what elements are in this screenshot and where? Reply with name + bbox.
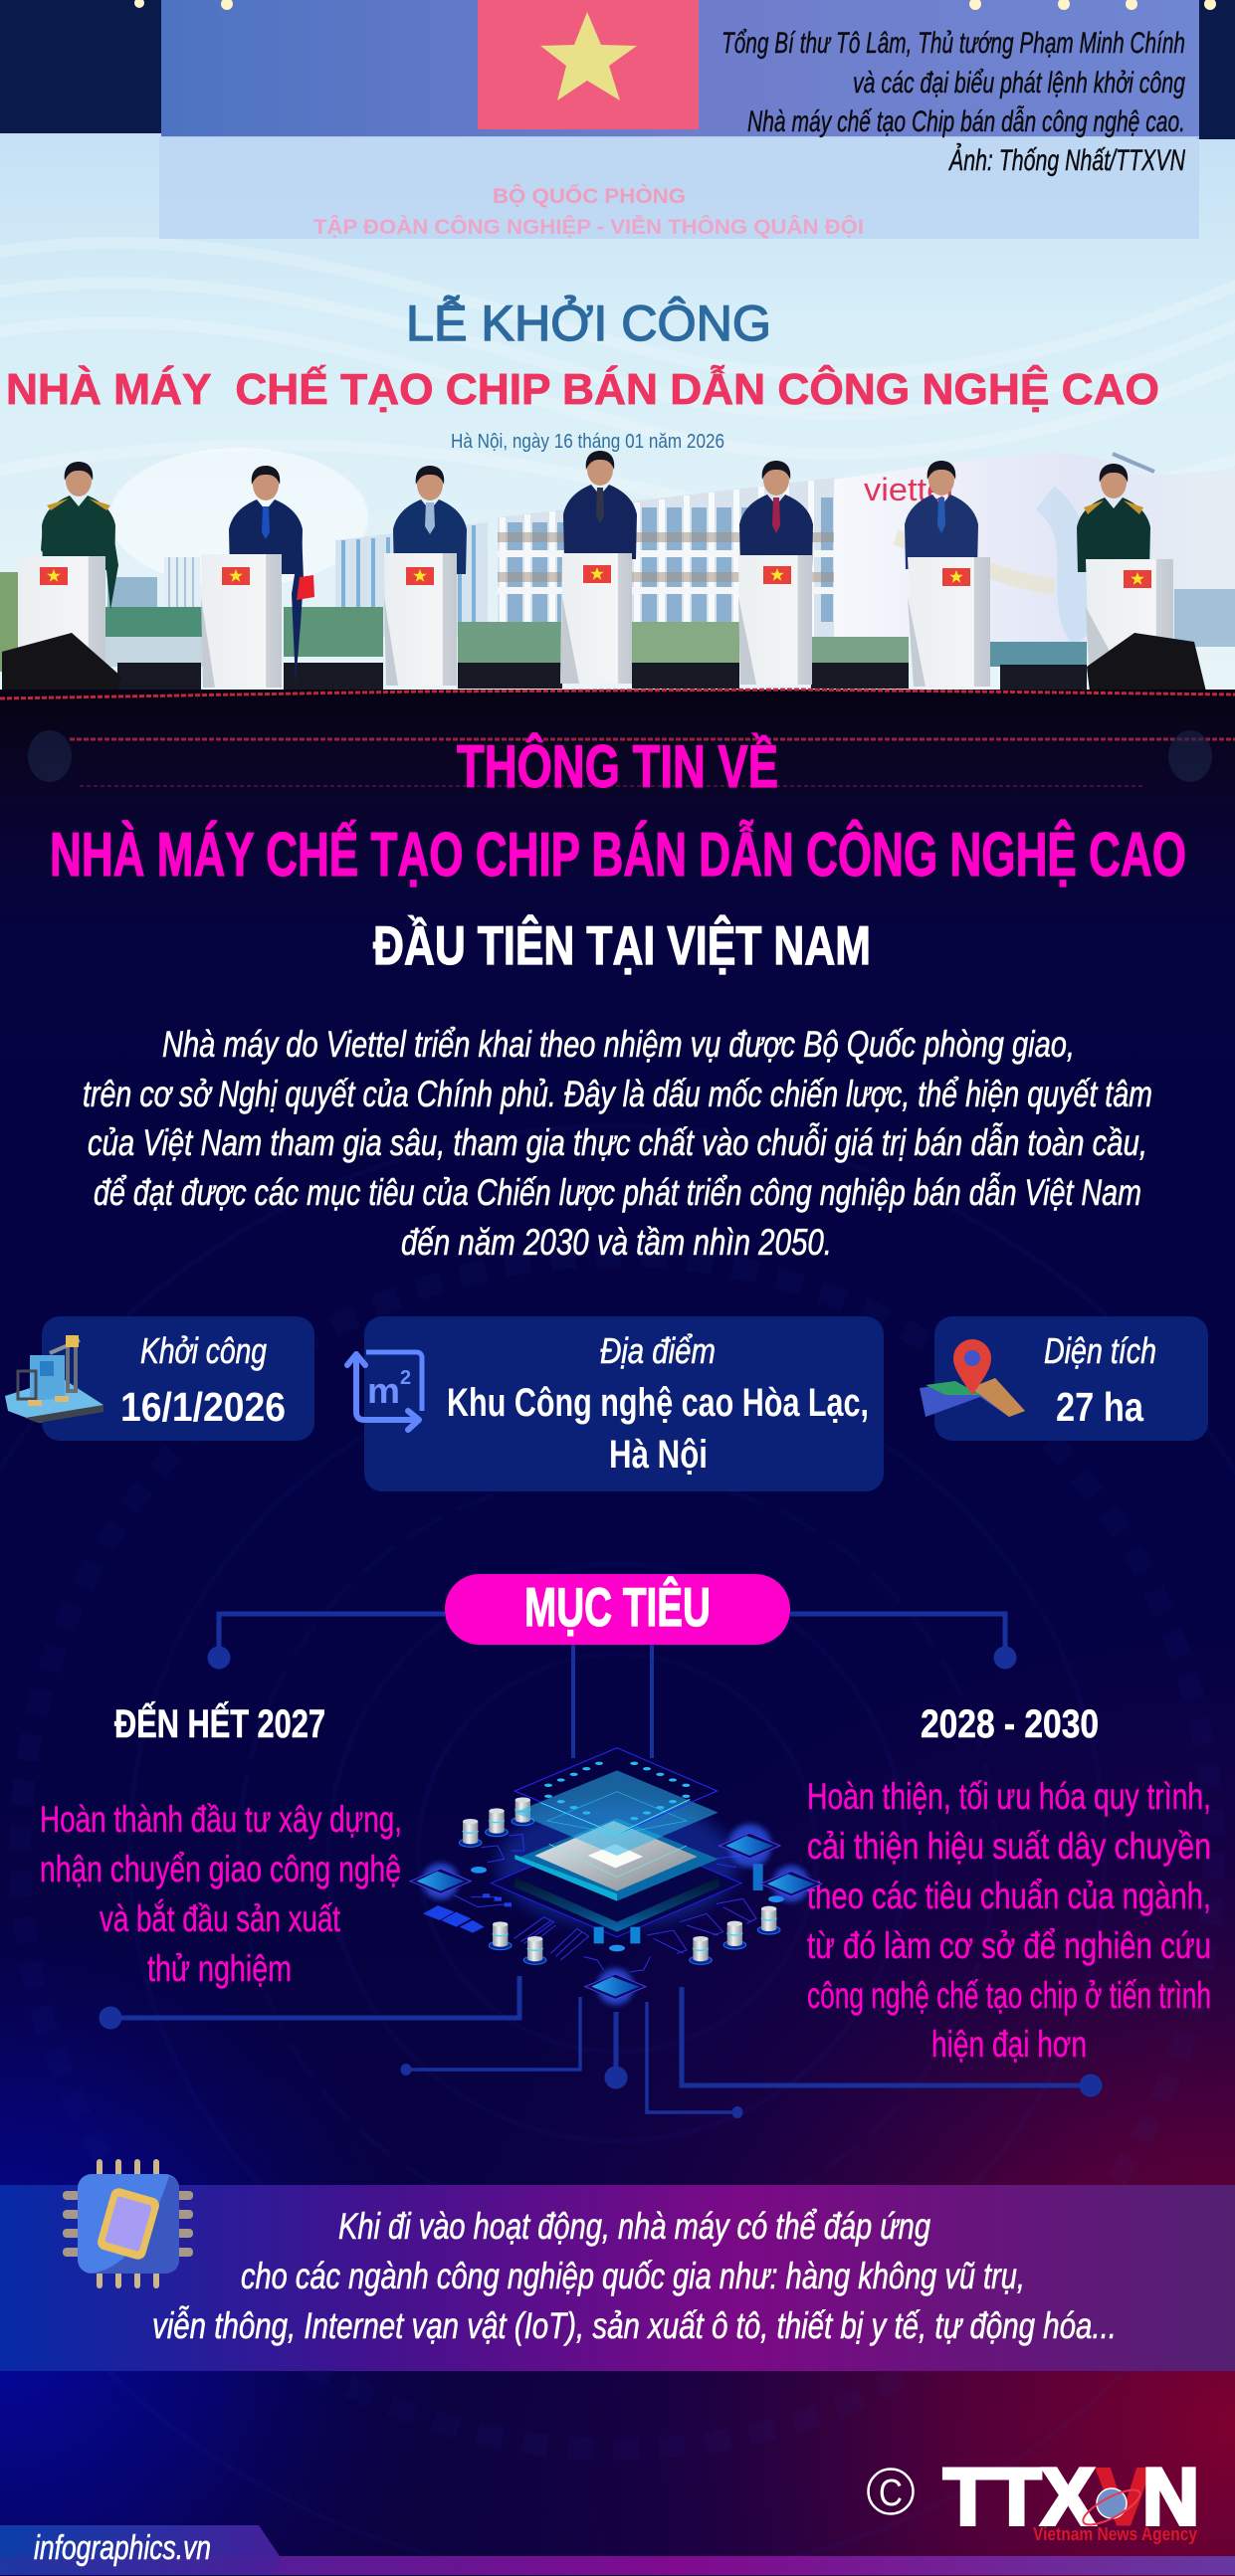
glass wing right bbox=[498, 478, 836, 637]
stage lights bbox=[117, 663, 1087, 691]
podium 5 bbox=[738, 555, 812, 685]
card: địa điểm: Hà Nội bbox=[609, 1433, 708, 1477]
footer tab: website bbox=[0, 2525, 280, 2575]
banner: applications bbox=[0, 2185, 1235, 2371]
heading pill: mục tiêu: MỤC TIÊU bbox=[524, 1576, 711, 1638]
card: khởi công: 16/1/2026 bbox=[120, 1384, 286, 1430]
person 7 bbox=[1077, 464, 1150, 572]
title block bbox=[50, 733, 1186, 976]
stage floor bbox=[0, 690, 1235, 809]
footer tab: website: infographics.vn bbox=[34, 2529, 211, 2567]
card: địa điểm: Khu Công nghệ cao Hòa Lạc, bbox=[447, 1381, 869, 1425]
intro paragraph bbox=[83, 1024, 1152, 1263]
card: diện tích: 27 ha bbox=[1056, 1384, 1144, 1430]
icon: construction site bbox=[5, 1335, 103, 1423]
white main building bbox=[834, 453, 1235, 647]
banner: applications: Khi đi vào hoạt động, nhà máy có thể đáp ứng bbox=[338, 2206, 930, 2247]
person 3 bbox=[393, 466, 467, 574]
screen title text: BỘ QUỐC PHÒNG bbox=[493, 184, 686, 208]
screen title text: NHÀ MÁY CHẾ TẠO CHIP BÁN DẪN CÔNG NGHỆ CAO bbox=[6, 363, 1159, 414]
person 5 bbox=[739, 461, 813, 569]
glass wing left bbox=[164, 522, 488, 637]
person 1 bbox=[41, 462, 118, 610]
stage speaker right bbox=[1087, 633, 1206, 692]
title block: THÔNG TIN VỀ bbox=[457, 733, 778, 800]
person 4 bbox=[563, 451, 637, 559]
intro paragraph: đến năm 2030 và tầm nhìn 2050. bbox=[401, 1222, 832, 1263]
heading pill: mục tiêu bbox=[445, 1574, 790, 1645]
person 2 bbox=[229, 466, 304, 684]
white main building: viettel bbox=[864, 472, 953, 507]
podium 2 bbox=[201, 554, 282, 688]
goal: end of 2027: thử nghiệm bbox=[147, 1948, 292, 1989]
goal: end of 2027: và bắt đầu sản xuất bbox=[100, 1898, 341, 1939]
factory building render bbox=[0, 453, 1235, 691]
icon: square metre: 2 bbox=[400, 1367, 411, 1389]
logo: TTXVN: V bbox=[1097, 2453, 1150, 2542]
card: địa điểm bbox=[347, 1316, 884, 1491]
goal: 2028-2030 bbox=[807, 1702, 1211, 2065]
icon: map pin bbox=[920, 1339, 1025, 1417]
chip illustration bbox=[410, 1748, 822, 2005]
podium 6 bbox=[908, 557, 990, 687]
stage speaker left bbox=[2, 633, 121, 692]
podium 1 bbox=[18, 556, 105, 688]
red cloth bbox=[297, 575, 314, 600]
goal: end of 2027: Hoàn thành đầu tư xây dựng, bbox=[40, 1799, 402, 1840]
icon: square metre bbox=[347, 1352, 422, 1430]
copyright mark bbox=[868, 2470, 914, 2514]
podium 4 bbox=[560, 553, 632, 684]
card: diện tích bbox=[920, 1316, 1208, 1441]
goal: end of 2027: nhận chuyển giao công nghệ bbox=[40, 1849, 401, 1889]
logo: TTXVN: Vietnam News Agency bbox=[1033, 2524, 1197, 2544]
podium 7 bbox=[1086, 559, 1173, 687]
copyright mark: C bbox=[879, 2473, 903, 2514]
screen title text: LỄ KHỞI CÔNG bbox=[406, 295, 771, 351]
goal: end of 2027 bbox=[40, 1700, 402, 1989]
logo: TTXVN: N bbox=[1142, 2453, 1199, 2542]
screen title text: TẬP ĐOÀN CÔNG NGHIỆP - VIỄN THÔNG QUÂN ĐỘI bbox=[313, 215, 864, 239]
icon: square metre: m bbox=[367, 1370, 400, 1411]
card: khởi công: Khởi công bbox=[140, 1330, 267, 1371]
card: địa điểm: Địa điểm bbox=[600, 1330, 716, 1371]
goal: end of 2027: ĐẾN HẾT 2027 bbox=[114, 1700, 325, 1746]
logo: TTXVN bbox=[943, 2453, 1199, 2544]
screen title text bbox=[6, 184, 1159, 453]
hero photo: groundbreaking ceremony bbox=[0, 0, 1235, 809]
photo caption bbox=[721, 27, 1185, 177]
trees and forecourt bbox=[0, 572, 1087, 672]
vietnam flag on screen bbox=[478, 0, 699, 129]
person 6 bbox=[905, 461, 978, 569]
footer bar bbox=[0, 2556, 1235, 2575]
title block: ĐẦU TIÊN TẠI VIỆT NAM bbox=[373, 914, 871, 976]
officials at podiums bbox=[2, 451, 1206, 692]
icon: microchip bbox=[63, 2159, 193, 2288]
card: diện tích: Diện tích bbox=[1044, 1330, 1156, 1371]
connector lines: top bbox=[207, 1614, 1017, 1758]
podium 3 bbox=[384, 553, 457, 686]
goal: 2028-2030: hiện đại hơn bbox=[931, 2024, 1087, 2065]
goal: 2028-2030: 2028 - 2030 bbox=[921, 1702, 1099, 1746]
logo: TTXVN: TTX bbox=[943, 2453, 1095, 2542]
card: khởi công bbox=[5, 1316, 314, 1441]
connector lines: bottom bbox=[100, 1976, 1103, 2118]
banner: applications: cho các ngành công nghiệp quốc gia như: hàng không vũ trụ, bbox=[241, 2256, 1025, 2296]
stage backdrop and LED screen bbox=[0, 0, 1235, 696]
screen title text: Hà Nội, ngày 16 tháng 01 năm 2026 bbox=[451, 431, 724, 453]
